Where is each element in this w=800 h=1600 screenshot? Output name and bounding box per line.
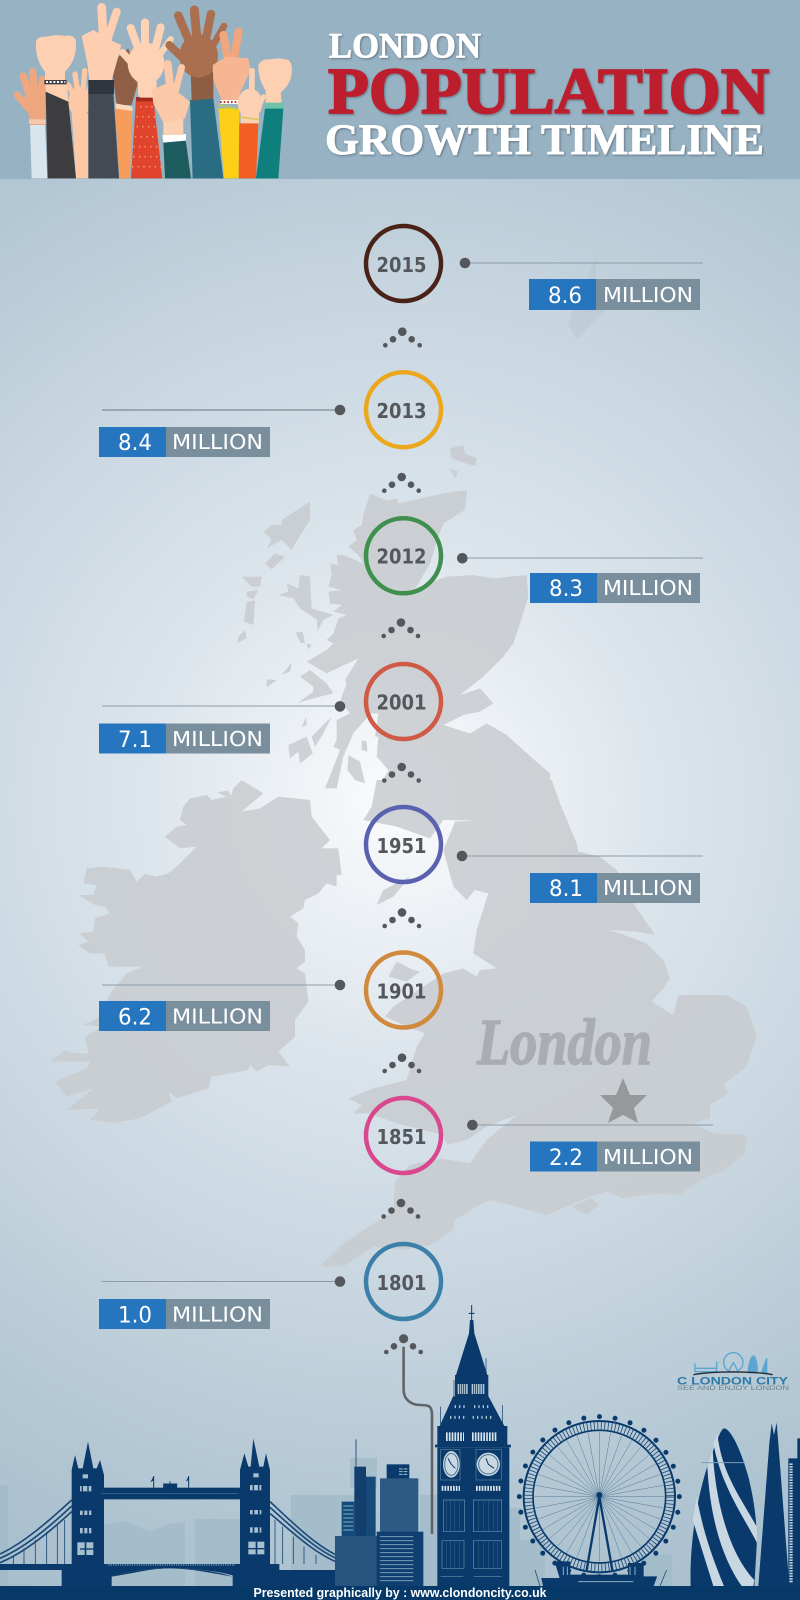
timeline: 2013: 8.4 — [118, 431, 152, 456]
eye spokes — [534, 1432, 664, 1562]
connector from last dots to Big Ben — [384, 1334, 432, 1534]
header band — [0, 0, 800, 179]
city towers — [335, 1439, 423, 1587]
hand: peace with dark teal sleeve — [152, 64, 191, 178]
timeline: 1801: 1.0 — [118, 1304, 152, 1328]
timeline: 2012: MILLION — [603, 576, 693, 600]
hand: open palm with red sleeve — [123, 22, 171, 178]
logo: C London City — [677, 1353, 789, 1392]
timeline: 2013: 2013 — [376, 399, 426, 423]
hand: big brown with teal-blue sleeve — [169, 10, 224, 178]
hand: small behind — [68, 71, 90, 178]
timeline: 2015: 8.6 — [548, 284, 582, 309]
timeline: 2013 — [99, 372, 441, 457]
map label: London: London — [476, 1006, 652, 1079]
timeline: 1851: 2.2 — [549, 1146, 583, 1171]
title — [325, 26, 769, 164]
timeline: 2015 — [366, 226, 703, 310]
connector dots — [383, 327, 422, 348]
upper body — [437, 1426, 507, 1446]
logo tagline: SEE AND ENJOY LONDON — [677, 1385, 789, 1392]
Tower Bridge — [0, 1438, 340, 1587]
clock tower shaft — [437, 1447, 509, 1587]
footer bar — [0, 1586, 800, 1600]
London Eye — [519, 1417, 679, 1586]
spire — [469, 1305, 475, 1320]
map: Scotland — [237, 490, 550, 800]
hand: peace with slate sleeve — [82, 7, 121, 178]
timeline: 1851 — [366, 1098, 713, 1173]
timeline: 1851: MILLION — [603, 1145, 693, 1169]
timeline: 1951: 1951 — [376, 834, 426, 858]
Shard and office tower — [758, 1423, 800, 1586]
hand: fist with teal sleeve — [256, 58, 292, 178]
timeline: 2015: 2015 — [376, 253, 426, 277]
timeline: 1851: 1851 — [376, 1125, 426, 1149]
map: England and Wales — [320, 780, 757, 1267]
connector dots — [382, 1053, 421, 1073]
timeline: 2001: MILLION — [172, 727, 263, 751]
logo icon: skyline — [693, 1353, 773, 1375]
walkway — [100, 1488, 240, 1499]
connector dots — [382, 908, 421, 928]
pale background buildings — [0, 1458, 672, 1586]
timeline: 1801: 1801 — [376, 1271, 426, 1295]
logo name: C LONDON CITY — [677, 1376, 789, 1388]
tower windows — [77, 1473, 264, 1555]
shaft panels — [441, 1500, 502, 1577]
belfry — [455, 1375, 488, 1398]
timeline: 2015: MILLION — [603, 283, 693, 307]
bridge cables — [0, 1500, 340, 1564]
timeline: 1951 — [366, 807, 703, 903]
Big Ben — [435, 1305, 511, 1587]
timeline: 1801: MILLION — [172, 1302, 263, 1326]
Gherkin — [691, 1428, 757, 1586]
eye base — [535, 1562, 667, 1586]
map: British Isles — [50, 445, 757, 1267]
piers and deck — [0, 1564, 338, 1587]
map: Shetland — [568, 255, 606, 340]
timeline: 1901 — [99, 952, 441, 1031]
timeline: 1901: 1901 — [376, 980, 426, 1004]
eye hub and legs — [587, 1497, 612, 1570]
connector dots — [381, 618, 420, 638]
timeline: 1901: 6.2 — [118, 1006, 152, 1030]
timeline: 1951: MILLION — [603, 876, 693, 900]
hand: fist with charcoal sleeve — [36, 35, 76, 178]
timeline: 2012: 2012 — [376, 544, 426, 568]
map: Orkney — [450, 445, 477, 478]
connector dots — [382, 473, 421, 493]
connector dots — [381, 1199, 420, 1219]
left tower — [72, 1442, 104, 1564]
hand: peace with yellow sleeve — [213, 32, 251, 178]
illustration: raised hands — [17, 7, 292, 178]
flags and crest — [154, 1476, 189, 1488]
timeline: 1901: MILLION — [172, 1004, 263, 1028]
timeline: 2012 — [366, 518, 703, 603]
title line: LONDON: LONDON — [329, 26, 481, 66]
hand: tan left — [17, 72, 47, 178]
timeline: 2001 — [99, 664, 441, 754]
title line: GROWTH TIMELINE: GROWTH TIMELINE — [325, 117, 764, 164]
title line: POPULATION: POPULATION — [328, 55, 769, 128]
timeline: 1951: 8.1 — [549, 877, 583, 902]
timeline: 2012: 8.3 — [549, 577, 583, 602]
footer credit: Presented graphically by : www.clondoncity.co.uk — [254, 1586, 547, 1600]
hand: brown behind — [112, 48, 137, 178]
eye rim — [524, 1421, 675, 1572]
roof — [440, 1358, 504, 1426]
timeline: 2013: MILLION — [172, 430, 263, 454]
right tower — [240, 1438, 270, 1564]
map star — [600, 1078, 647, 1123]
timeline: 2001: 7.1 — [118, 728, 152, 753]
timeline: 1801 — [99, 1244, 441, 1329]
clock faces — [443, 1451, 460, 1478]
connector dots — [382, 763, 421, 783]
hand: small with orange sleeve — [238, 71, 263, 178]
timeline: 2001: 2001 — [376, 690, 426, 714]
map: Ireland — [50, 780, 342, 1123]
eye pods — [519, 1417, 679, 1577]
